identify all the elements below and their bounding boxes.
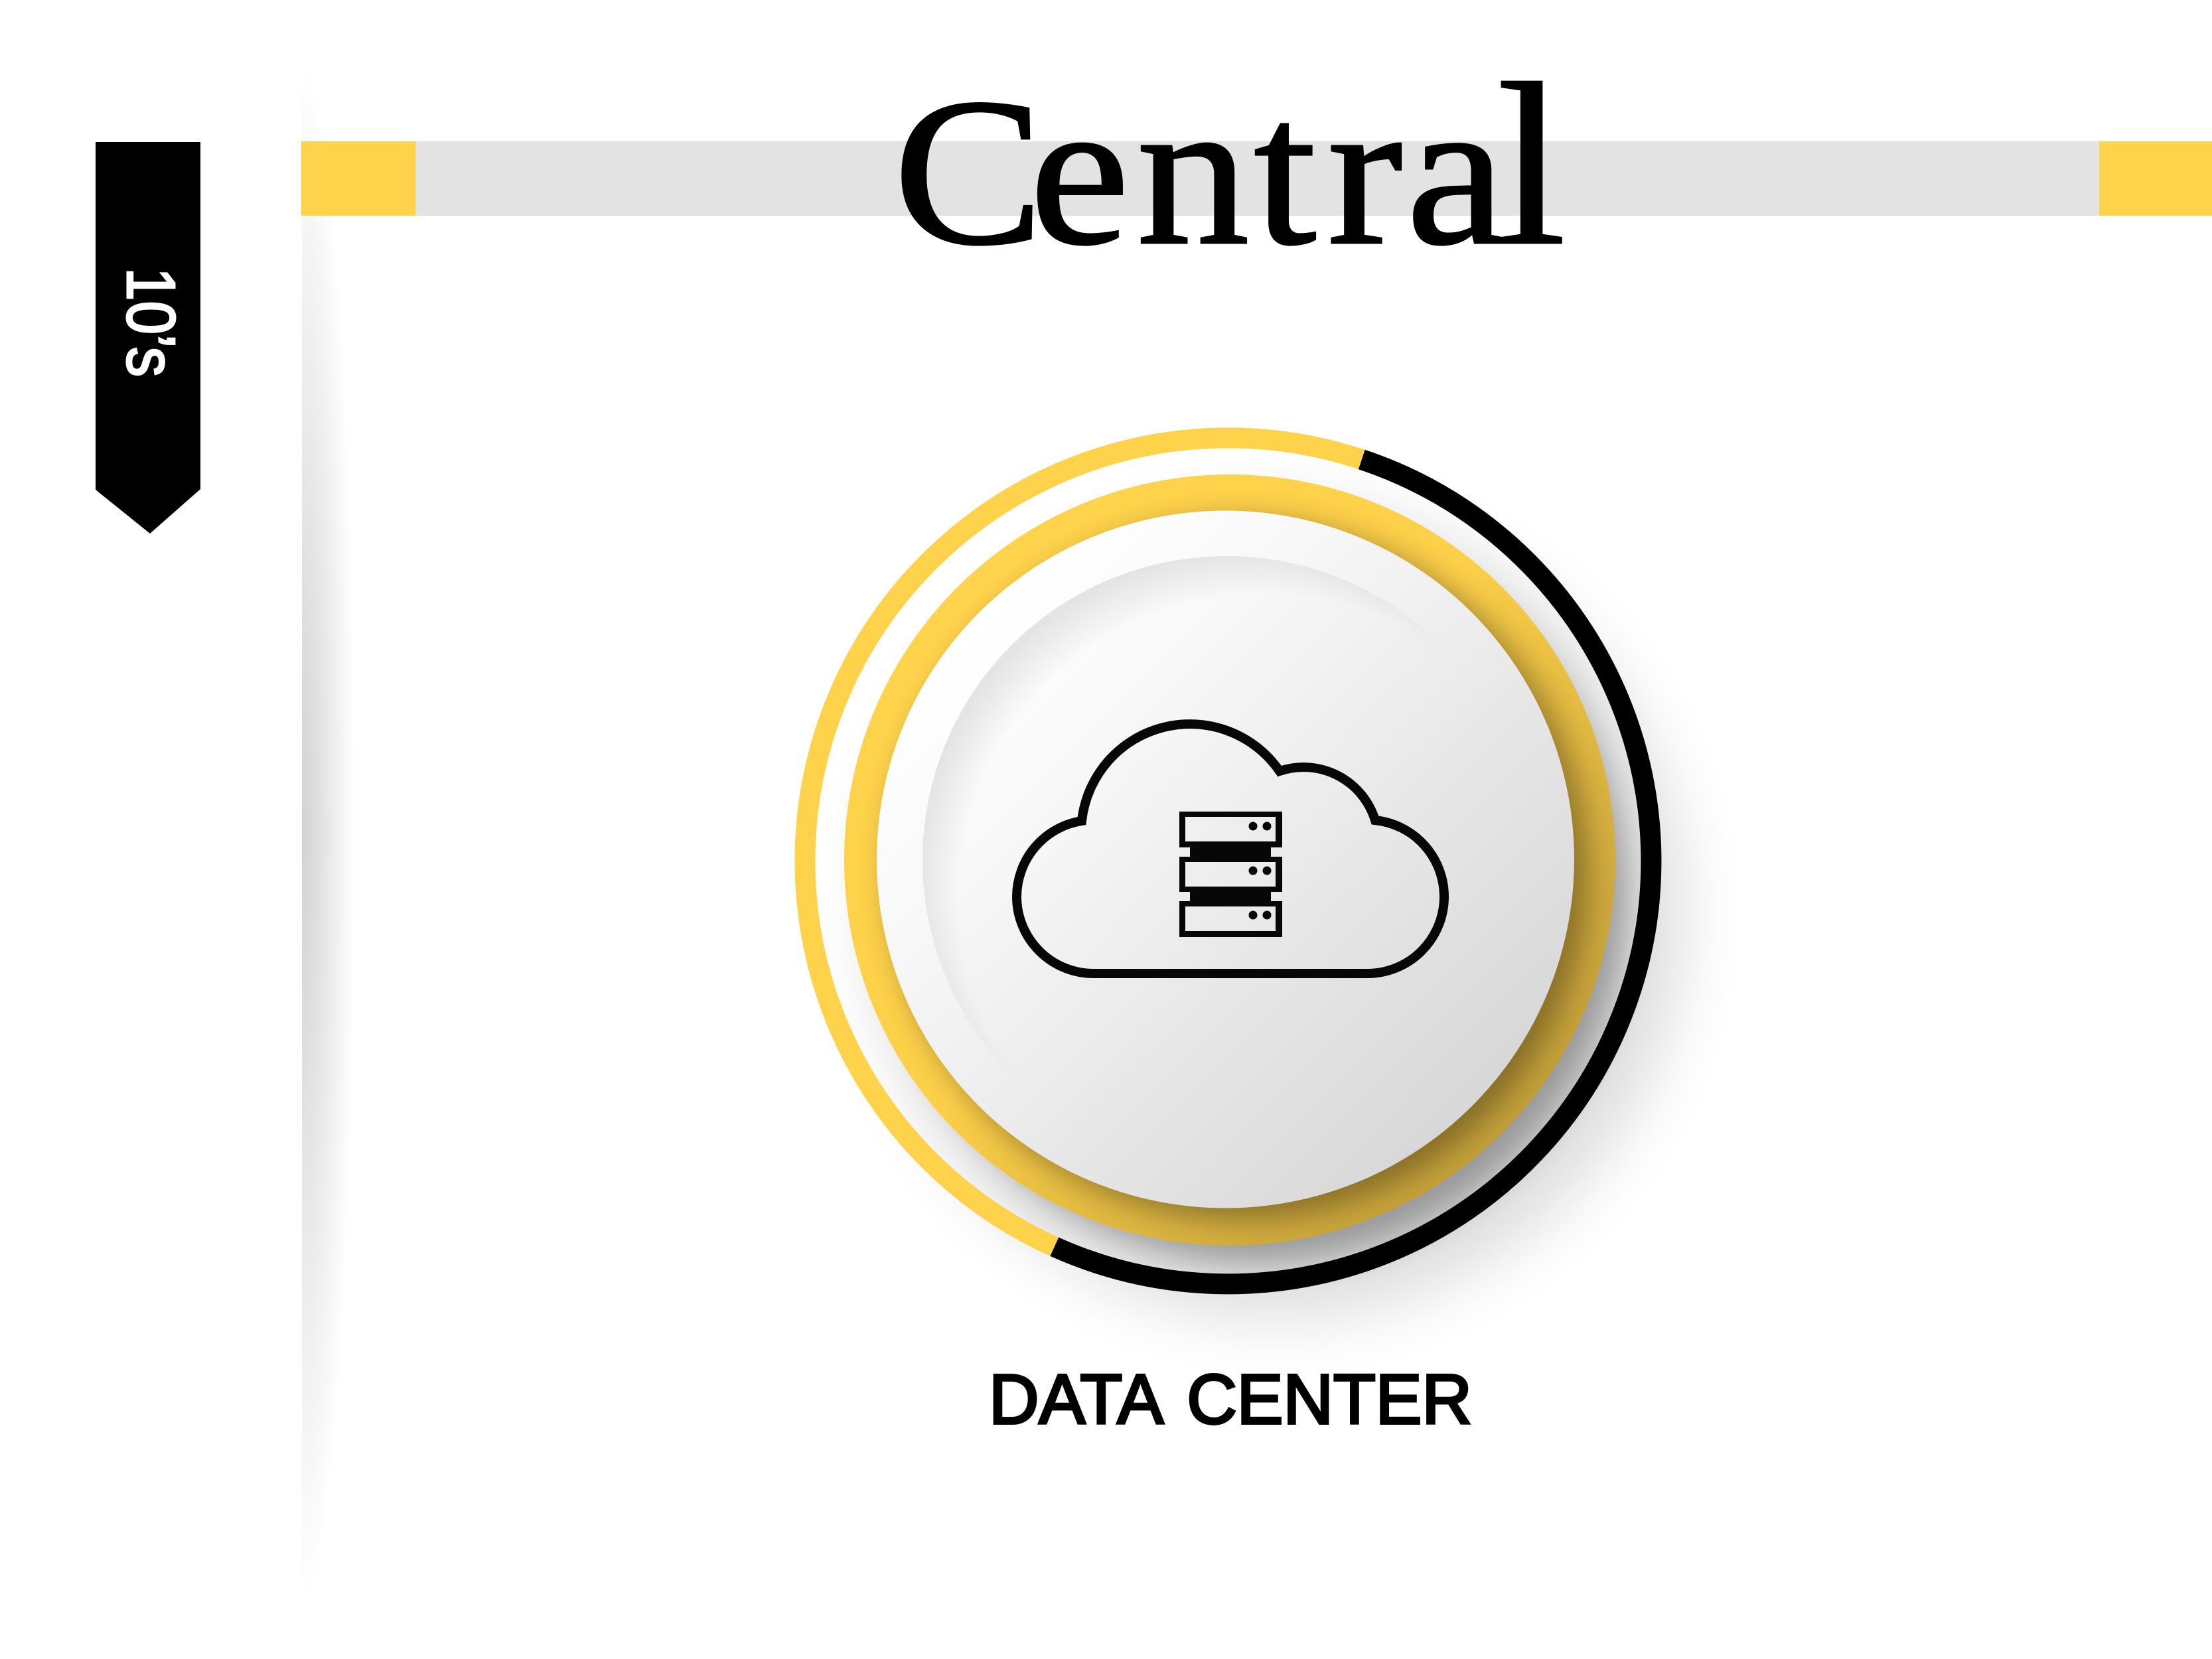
drop shadow of dial	[871, 506, 1684, 1319]
icon: cloud with server stack	[1017, 724, 1444, 974]
title: Central	[893, 36, 1566, 293]
outer ring: yellow arc	[805, 438, 1362, 1247]
cloud outline	[1017, 724, 1444, 974]
ribbon tag: 10's: 10’s	[113, 267, 189, 377]
page edge shadow	[302, 216, 345, 1468]
server stack	[1179, 812, 1282, 937]
ribbon tag: 10's	[96, 142, 200, 534]
central dial	[805, 438, 1684, 1319]
header band	[301, 141, 2212, 216]
inner dish shading	[922, 556, 1530, 1164]
white disc	[877, 511, 1574, 1208]
yellow inner ring	[844, 474, 1615, 1246]
label: DATA CENTER	[989, 1360, 1472, 1439]
outer ring: black arc	[1055, 459, 1651, 1284]
